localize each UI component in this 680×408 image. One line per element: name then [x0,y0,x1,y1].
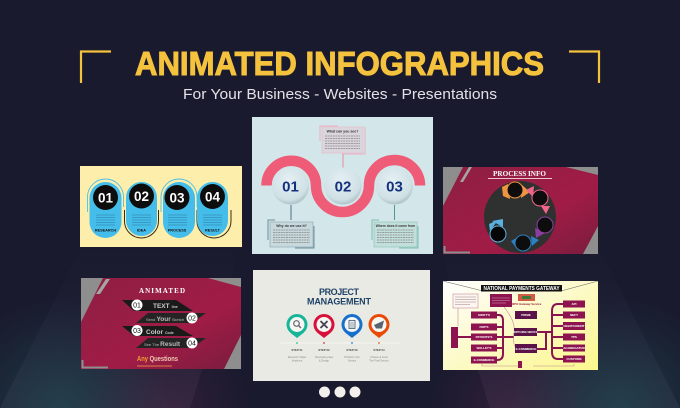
row 01 [122,300,193,311]
pin step 03: STEP 03 [346,348,358,352]
pill 03: PROCESS [168,228,187,232]
right boxes: DEBIT/CREDIT [564,324,585,328]
centre boxes: SWITCHING SERVICE [514,332,538,334]
title bracket left [81,52,111,83]
row 04: 04 [188,340,196,348]
title: ANIMATED INFOGRAPHICS [135,45,544,82]
right boxes: API [571,302,577,306]
pin step 04 [368,314,390,362]
pin step 03: Service [348,360,357,362]
pin step 01: Research Target [288,356,306,359]
pin step 04: STEP 04 [373,348,385,352]
node orange [502,182,530,199]
row 04: See The Result [144,341,181,348]
node pink [526,186,550,214]
pin step 02: & Design [319,360,330,362]
callout left: Why do we use it? [276,224,307,228]
subtitle: For Your Business - Websites - Presentations [183,86,497,103]
centre boxes: E-COMMERCE [516,347,536,351]
connectors [458,304,563,360]
pill 01 [90,182,122,238]
button 01: 01 [282,178,299,196]
right boxes [563,300,586,362]
panel: centre 01 02 03 wave [252,117,433,254]
node blue [511,235,539,251]
panel: animated list [81,278,241,369]
note boxes [453,294,512,308]
row 03: 03 [133,328,141,335]
carousel dots [319,386,360,398]
pin step 02: Developing Idea [315,356,334,359]
centre boxes: PRIME [521,313,531,317]
panel: project management: MANAGEMENT [307,296,372,306]
centre boxes [514,311,538,353]
heading: PROJECT [319,287,360,297]
left boxes: SWIFT'S [478,313,490,317]
pin step 01: Audience [292,360,303,362]
pin step 01 [286,314,308,362]
row 02 [136,312,206,324]
button 03: 03 [386,178,403,196]
right boxes: NEFT [570,313,578,317]
heading: NATIONAL PAYMENTS GATEWAY [484,286,560,292]
left boxes: PAYNOTE'S [476,335,492,339]
pin step 02 [314,314,334,362]
pin step 03: Prioritize Your [344,356,360,359]
callout right: Where does it come from [376,224,415,228]
pin step 02: STEP 02 [318,348,330,352]
left boxes: WALLET'S [476,346,492,350]
callout left [268,220,314,248]
pill 01: 01 [98,190,113,206]
button 02: 02 [335,178,351,196]
pill 04: 04 [205,190,220,204]
heading: ANIMATED [139,287,185,295]
dark wheel [484,181,556,253]
button 03 [376,168,413,204]
bottom badge [518,361,522,368]
node purple [535,217,553,238]
row 02: 02 [188,316,196,322]
pink wave [266,160,420,212]
pill 02: 02 [134,189,149,204]
panel: process info circle [443,167,598,254]
pin step 03 [342,314,362,362]
callout top: What can you see? [327,130,358,134]
pill 02 [126,182,157,236]
row 01: 01 [133,302,141,310]
title bracket right [569,52,599,83]
row 04 [136,338,206,348]
pill 04 [197,182,228,236]
button 02 [324,168,362,204]
pill 01: RESEARCH [95,228,116,232]
panel: national payments gateway [443,281,598,370]
logo: NPCI Gateway Service [512,302,542,306]
panel: four blue pills [80,166,242,247]
logo [512,294,542,306]
right boxes: AGGREGATOR [563,346,586,350]
left boxes: E-COMMERCE [474,358,494,362]
pin step 04: The Final Service [369,360,389,362]
row 03: Color Code [146,329,174,336]
right boxes: CUSTOMS [567,357,581,361]
node light blue [489,219,506,242]
left boxes [451,312,497,364]
row 03 [122,325,193,336]
pill 03 [163,182,195,238]
pill 03: 03 [169,190,185,206]
pill 02: IDEA [137,228,146,232]
any questions: Any Questions [137,356,178,363]
pill 04: RESULT [205,228,221,232]
pin step 01: STEP 01 [291,348,303,352]
row 01: TEXT line [153,303,178,310]
panel: project management [253,270,430,381]
thin connectors [458,307,574,366]
callout right [372,220,418,248]
left boxes: FMP'S [479,325,489,329]
button 01 [272,168,309,204]
row 02: Send Your Sketch [146,316,184,323]
right boxes: TPS [571,335,577,339]
callout top [320,126,365,154]
pin step 04: Choose & Grow [370,356,388,359]
heading: PROCESS INFO [493,170,547,178]
